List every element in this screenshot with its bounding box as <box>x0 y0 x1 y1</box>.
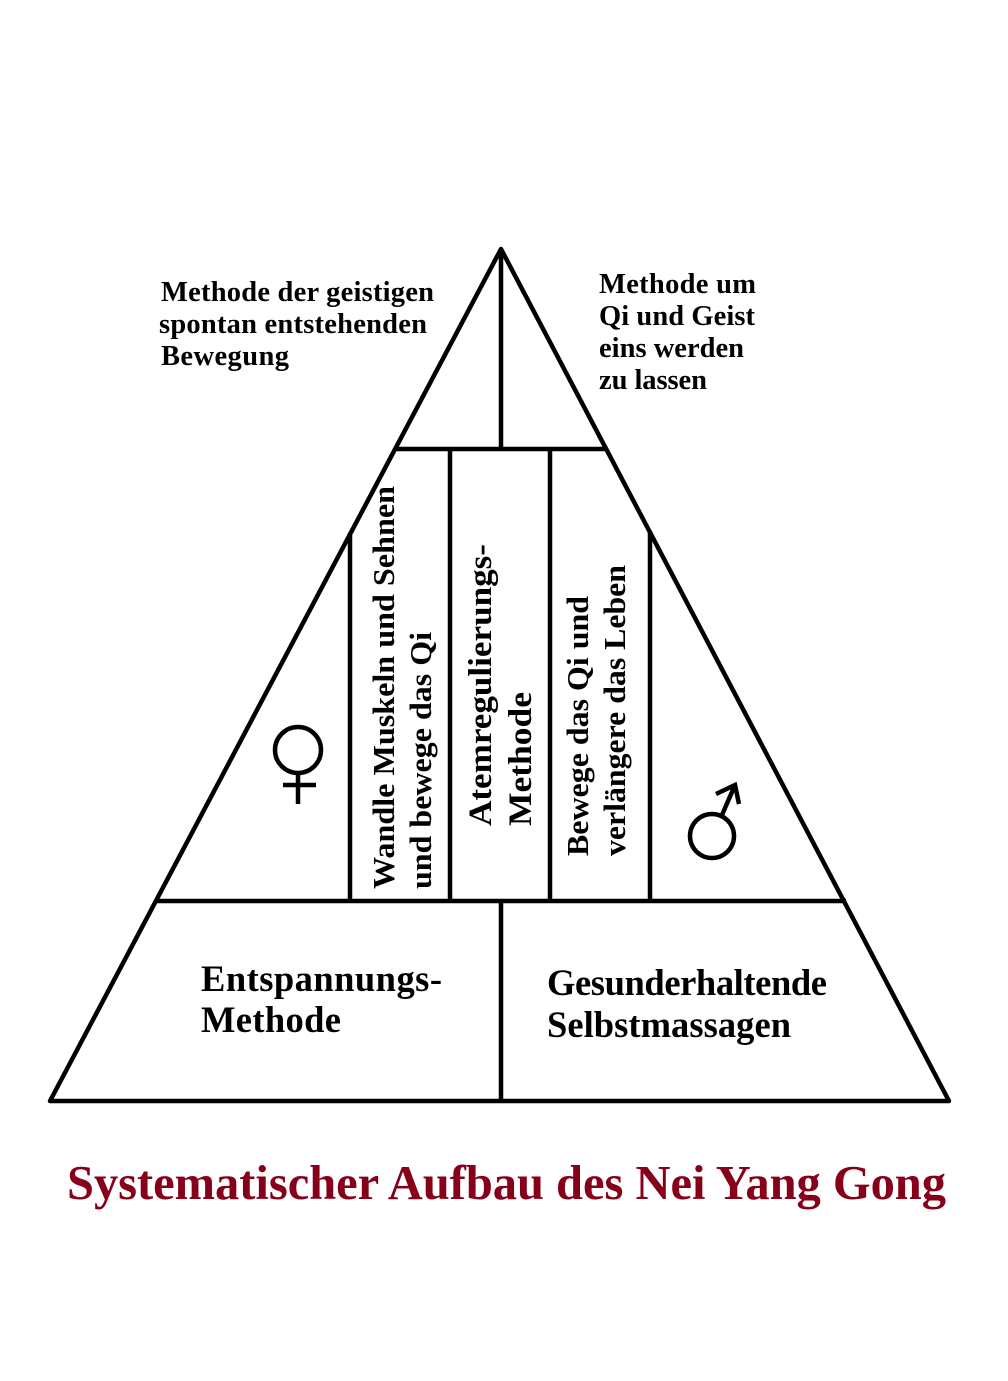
icon: male symbol <box>690 785 739 858</box>
text: top right method: Methode um <box>599 269 756 300</box>
pyramid outline <box>50 249 949 1101</box>
text: column 3: verlängere das Leben <box>597 565 632 856</box>
icon: female symbol <box>275 727 321 804</box>
text: relaxation method: Methode <box>201 999 341 1040</box>
text: column 1: und bewege das Qi <box>403 632 438 889</box>
text: top right method: eins werden <box>599 333 744 364</box>
text: relaxation method: Entspannungs- <box>201 958 442 999</box>
text: top left method: Methode der geistigen <box>161 277 434 308</box>
text: top left method <box>159 277 434 372</box>
pyramid diagram <box>50 249 949 1101</box>
text: self massage <box>547 962 827 1045</box>
text: column 1: Wandle Muskeln und Sehnen <box>366 486 401 889</box>
text: column 3: Bewege das Qi und <box>560 596 595 856</box>
text: column 1 <box>366 486 438 889</box>
text: column 2 <box>463 544 539 826</box>
title: Systematischer Aufbau des Nei Yang Gong <box>67 1157 946 1210</box>
text: top left method: Bewegung <box>161 341 289 372</box>
text: self massage: Gesunderhaltende <box>547 962 827 1003</box>
text: self massage: Selbstmassagen <box>547 1004 791 1045</box>
text: column 3 <box>560 565 632 856</box>
pyramid dividers <box>155 249 846 1101</box>
text: top left method: spontan entstehenden <box>159 309 427 340</box>
text: top right method <box>599 269 756 396</box>
text: top right method: zu lassen <box>599 365 707 396</box>
text: top right method: Qi und Geist <box>599 301 756 332</box>
text: relaxation method <box>201 958 442 1040</box>
text: column 2: Methode <box>503 692 539 826</box>
text: column 2: Atemregulierungs- <box>463 544 499 826</box>
